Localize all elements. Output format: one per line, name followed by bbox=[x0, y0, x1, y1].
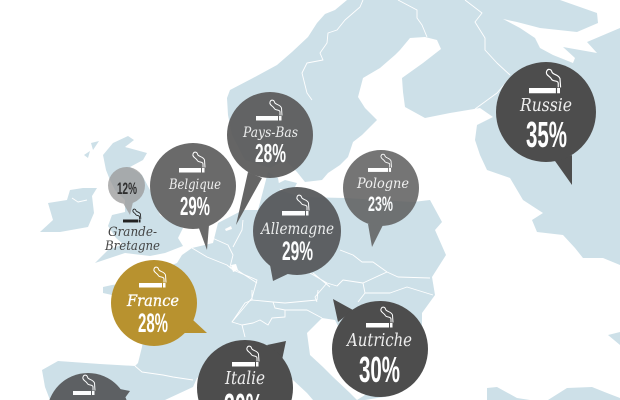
callout: Pologne 23%: Pologne bbox=[356, 176, 409, 192]
land: Hebrides bbox=[84, 141, 99, 158]
callout: Russie 35% bbox=[496, 62, 596, 185]
icon: cigarette bbox=[256, 100, 282, 120]
land: Caucasus bbox=[608, 332, 620, 345]
callout: Pays-Bas 28%: Pays-Bas bbox=[242, 125, 298, 141]
callout: Autriche 30%: 30% bbox=[359, 349, 400, 390]
callout: Espagne bbox=[47, 373, 130, 400]
icon: cigarette bbox=[368, 154, 391, 172]
callout: Belgique 29%: 29% bbox=[180, 191, 210, 221]
callout: France 28% bbox=[111, 260, 207, 346]
callout: Italie bbox=[197, 340, 293, 400]
callout: Autriche 30%: Autriche bbox=[345, 331, 412, 351]
icon: cigarette bbox=[123, 209, 141, 222]
callout: Allemagne 29% bbox=[253, 187, 341, 281]
callout: Autriche 30% bbox=[332, 299, 428, 397]
land: Scandinavia, Finland and Russia bbox=[227, 0, 620, 265]
callout: Pologne 23%: 23% bbox=[368, 193, 393, 216]
callout: Grande-Bretagne 12%: 12% bbox=[117, 179, 137, 198]
callout: Russie 35%: 35% bbox=[526, 114, 567, 155]
callout: France 28%: France bbox=[126, 292, 179, 310]
callout: Pologne 23% bbox=[343, 150, 419, 247]
land: continental Europe bbox=[42, 172, 446, 400]
icon: cigarette bbox=[232, 346, 259, 366]
land: Great Britain bbox=[95, 136, 183, 263]
sea: Adriatic bbox=[307, 318, 365, 400]
icon: cigarette bbox=[529, 69, 561, 93]
icon: cigarette bbox=[366, 307, 393, 328]
callout: Allemagne 29%: Allemagne bbox=[259, 220, 334, 238]
callout: Russie 35%: Russie bbox=[519, 96, 572, 116]
callout: Grande-Bretagne 12%: Grande- bbox=[108, 225, 157, 240]
lake and Luxembourg marks bbox=[225, 226, 238, 272]
country borders bbox=[72, 0, 510, 380]
icon: cigarette bbox=[282, 195, 309, 216]
icon: cigarette bbox=[139, 267, 166, 288]
icon: cigarette bbox=[179, 152, 205, 172]
land: Turkey bbox=[487, 387, 620, 400]
callout: Pays-Bas 28% bbox=[227, 92, 313, 225]
callout: Grande-Bretagne 12% bbox=[104, 167, 160, 254]
callout: Belgique 29% bbox=[150, 143, 236, 250]
callout: Allemagne 29%: 29% bbox=[282, 236, 313, 266]
callout: Italie: Italie bbox=[224, 369, 265, 389]
callout: Grande-Bretagne 12%: Bretagne bbox=[104, 239, 160, 254]
callout: France 28%: 28% bbox=[138, 308, 168, 338]
icon: cigarette bbox=[73, 375, 95, 395]
callout: Belgique 29%: Belgique bbox=[168, 177, 221, 193]
callout: Pays-Bas 28%: 28% bbox=[255, 138, 286, 168]
land: Danish island bbox=[277, 180, 297, 189]
land: Ireland bbox=[40, 188, 97, 232]
